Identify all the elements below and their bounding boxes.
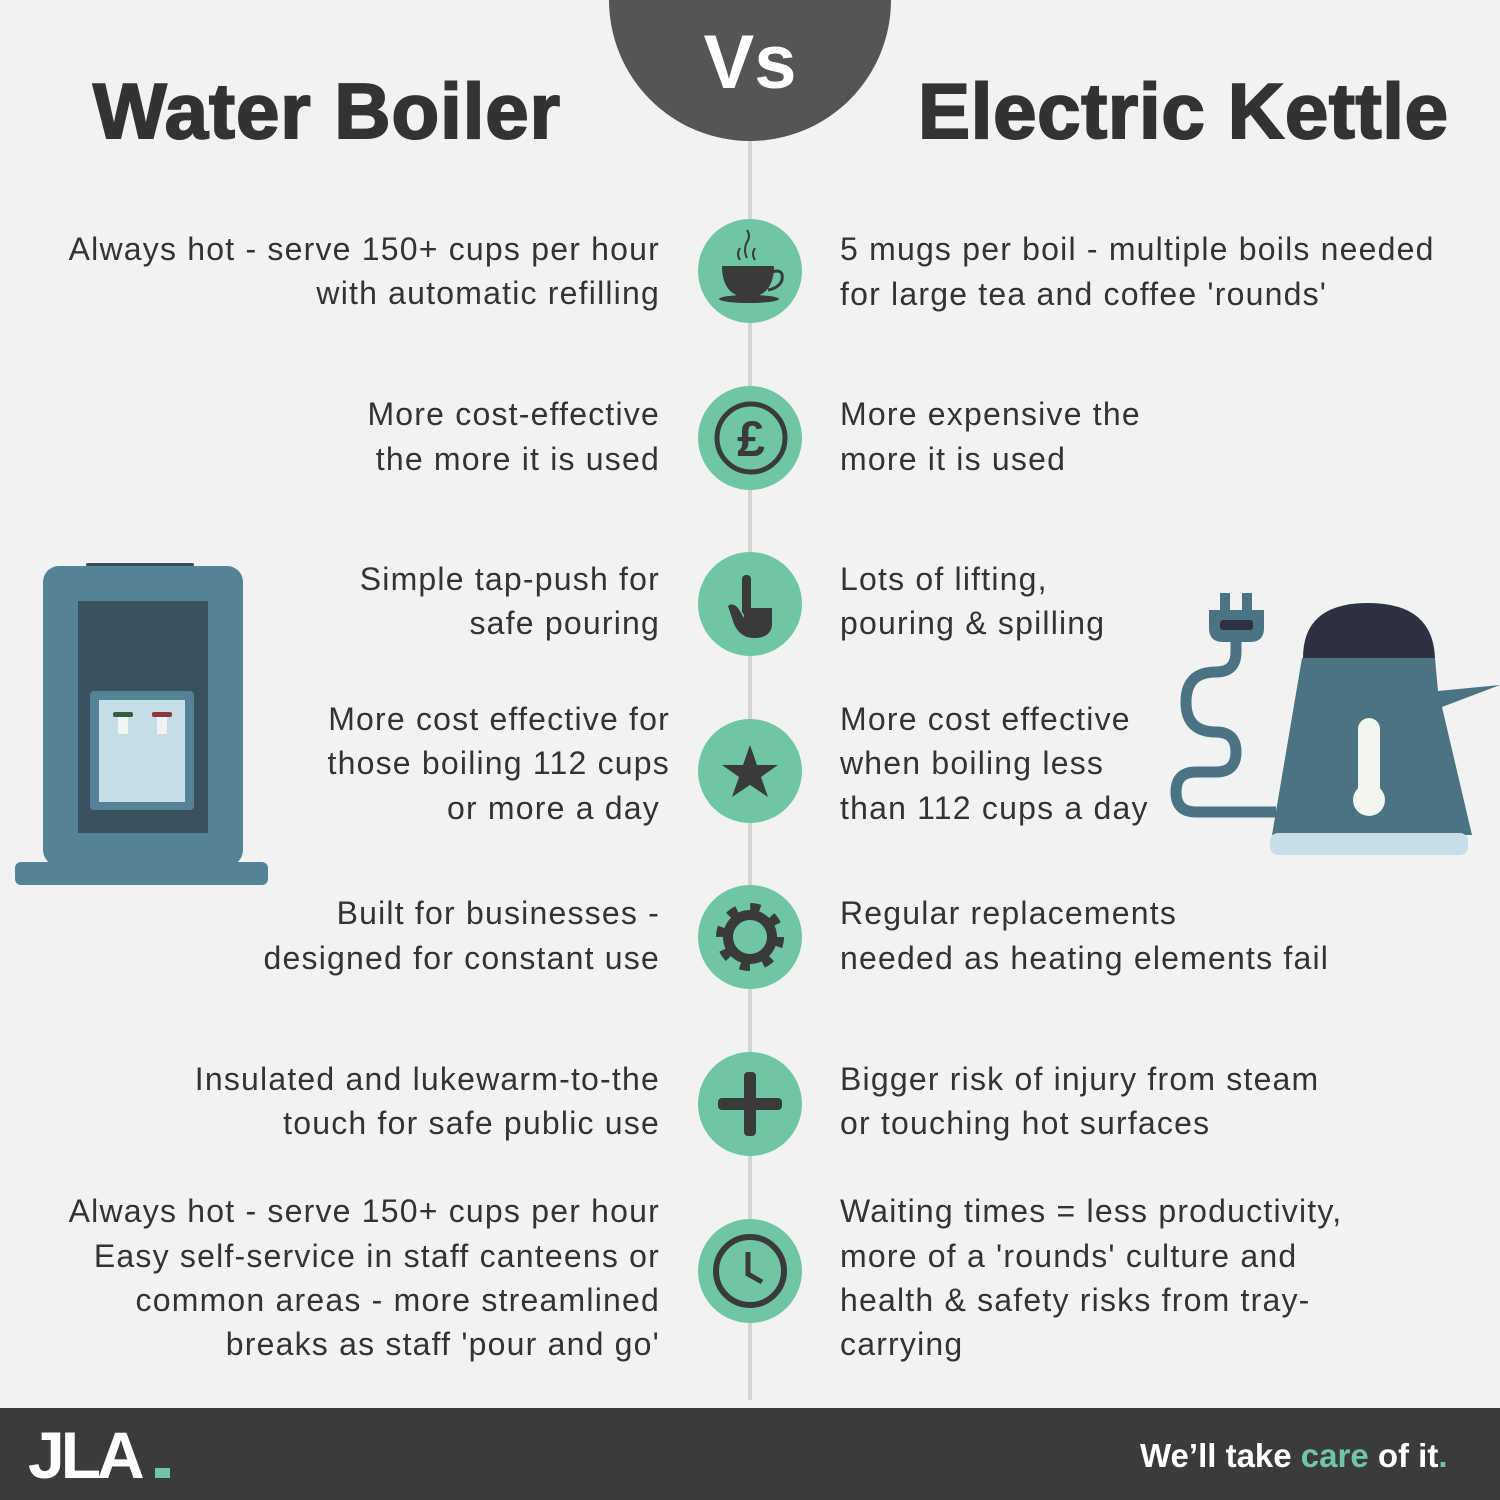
left text column: or more a day bbox=[447, 790, 660, 826]
right text column: Lots of lifting, bbox=[840, 561, 1048, 597]
icon: cup bbox=[698, 219, 802, 323]
vs circle bbox=[609, 0, 891, 141]
right text column: when boiling less bbox=[839, 745, 1104, 781]
left text column bbox=[69, 231, 670, 1362]
illustration: kettle bbox=[1176, 593, 1500, 855]
right text column: More expensive the bbox=[840, 396, 1141, 432]
right text column: or touching hot surfaces bbox=[840, 1105, 1210, 1141]
right text column: carrying bbox=[840, 1326, 963, 1362]
left text column: designed for constant use bbox=[264, 940, 660, 976]
right text column: pouring & spilling bbox=[840, 605, 1105, 641]
left text column: touch for safe public use bbox=[283, 1105, 660, 1141]
footer bbox=[0, 1408, 1500, 1500]
left text column: Simple tap-push for bbox=[360, 561, 660, 597]
left text column: More cost-effective bbox=[367, 396, 660, 432]
icon: hand bbox=[698, 552, 802, 656]
left text column: breaks as staff 'pour and go' bbox=[226, 1326, 660, 1362]
icon: star bbox=[698, 719, 802, 823]
right text column: More cost effective bbox=[840, 701, 1131, 737]
icon: pound bbox=[698, 386, 802, 490]
right text column: health & safety risks from tray- bbox=[840, 1282, 1311, 1318]
title: Electric Kettle: Electric Kettle bbox=[918, 67, 1448, 155]
right text column: more it is used bbox=[840, 441, 1066, 477]
left text column: Built for businesses - bbox=[337, 895, 660, 931]
right text column: than 112 cups a day bbox=[840, 790, 1149, 826]
vs circle: Vs bbox=[704, 20, 796, 105]
title: Water Boiler: Water Boiler bbox=[93, 67, 560, 155]
icon: clock bbox=[698, 1219, 802, 1323]
right text column: 5 mugs per boil - multiple boils needed bbox=[840, 231, 1435, 267]
illustration: water boiler bbox=[15, 563, 268, 885]
icon: pound: £ bbox=[737, 411, 765, 467]
logo: JLA: JLA bbox=[28, 1418, 143, 1492]
right text column: more of a 'rounds' culture and bbox=[840, 1238, 1297, 1274]
left text column: Insulated and lukewarm-to-the bbox=[195, 1061, 660, 1097]
left text column: Always hot - serve 150+ cups per hour bbox=[69, 1193, 660, 1229]
left text column: Always hot - serve 150+ cups per hour bbox=[69, 231, 660, 267]
right text column: Regular replacements bbox=[840, 895, 1177, 931]
right text column bbox=[839, 231, 1435, 1362]
right text column: needed as heating elements fail bbox=[840, 940, 1329, 976]
right text column: for large tea and coffee 'rounds' bbox=[840, 276, 1327, 312]
right text column: Bigger risk of injury from steam bbox=[840, 1061, 1319, 1097]
left text column: Easy self-service in staff canteens or bbox=[94, 1238, 660, 1274]
left text column: those boiling 112 cups bbox=[328, 745, 670, 781]
icon: plus bbox=[698, 1052, 802, 1156]
left text column: common areas - more streamlined bbox=[136, 1282, 660, 1318]
right text column: Waiting times = less productivity, bbox=[840, 1193, 1342, 1229]
tagline: We’ll take care of it. bbox=[1140, 1437, 1448, 1474]
left text column: with automatic refilling bbox=[315, 275, 660, 311]
icon: gear bbox=[698, 885, 802, 989]
left text column: the more it is used bbox=[376, 441, 660, 477]
left text column: More cost effective for bbox=[328, 701, 670, 737]
left text column: safe pouring bbox=[469, 605, 660, 641]
